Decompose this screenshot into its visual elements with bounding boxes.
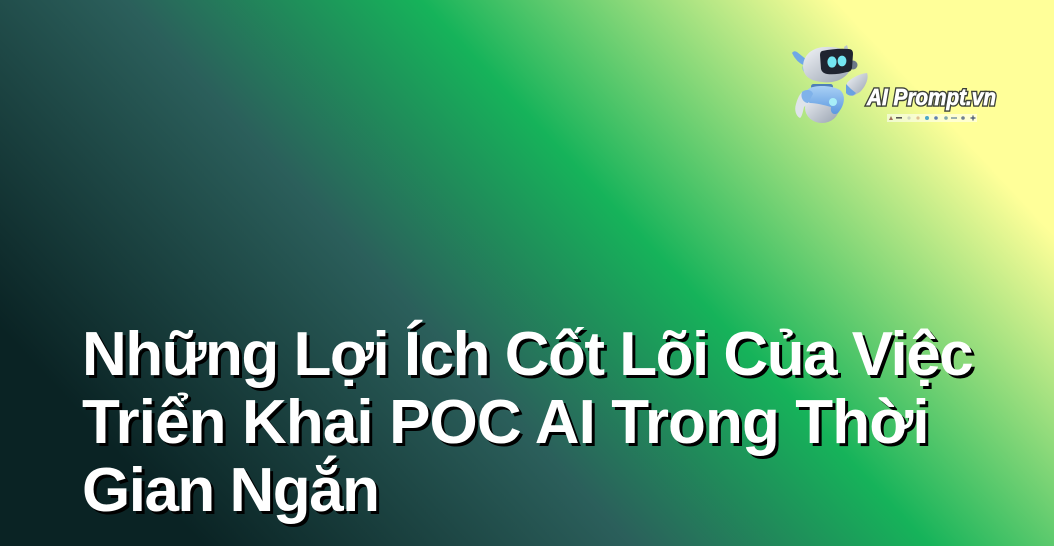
title: Triển Khai POC AI Trong Thời xyxy=(82,388,929,457)
icon: robot xyxy=(792,45,868,123)
logo icon row xyxy=(887,114,977,122)
title: Gian Ngắn xyxy=(82,456,379,525)
title xyxy=(82,320,975,527)
title: Những Lợi Ích Cốt Lõi Của Việc xyxy=(82,320,972,389)
logo: AI Prompt.vn robot xyxy=(792,45,997,123)
